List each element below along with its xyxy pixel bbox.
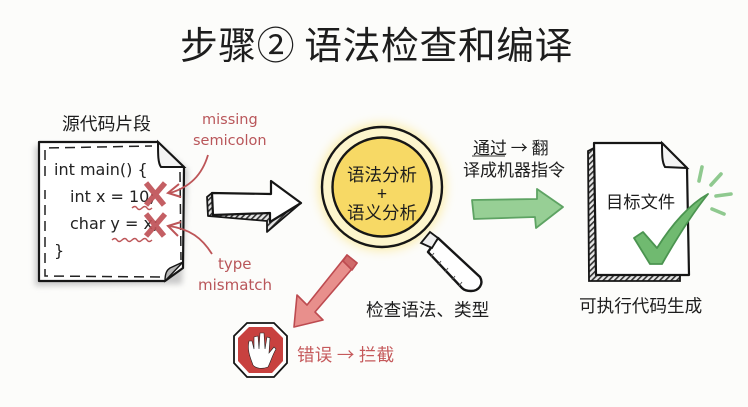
lens text: 语义分析 bbox=[347, 200, 417, 225]
callout: type mismatch bbox=[168, 222, 272, 294]
icon: green check bbox=[634, 167, 731, 264]
code lines: int main() { bbox=[54, 160, 148, 179]
caption: pass and translate bbox=[463, 134, 565, 181]
lens text bbox=[347, 162, 417, 225]
arrow: success path bbox=[472, 189, 563, 228]
object file document bbox=[588, 143, 689, 281]
callout: missing semicolon bbox=[168, 112, 267, 197]
title: 步骤② 语法检查和编译 bbox=[180, 15, 573, 70]
icon: stop sign bbox=[234, 323, 287, 377]
document label: 目标文件 bbox=[606, 188, 675, 213]
caption: check syntax and types: 检查语法、类型 bbox=[366, 297, 489, 322]
lens text: + bbox=[377, 181, 387, 206]
code lines: char y = x; bbox=[70, 214, 158, 233]
callout: type mismatch: type bbox=[218, 255, 252, 273]
caption: executable generated: 可执行代码生成 bbox=[579, 293, 702, 318]
code page bbox=[35, 142, 188, 286]
label: error blocked: 错误 → 拦截 bbox=[297, 342, 394, 367]
code lines: int x = 10; bbox=[70, 187, 155, 206]
icon: hand bbox=[248, 333, 276, 368]
lens ring bbox=[322, 127, 442, 247]
arrow: error path bbox=[294, 255, 357, 327]
handle bbox=[421, 232, 481, 291]
red cross marks bbox=[146, 183, 165, 236]
panel: source code snippet bbox=[35, 110, 272, 294]
caption: pass and translate: 通过 → 翻 bbox=[473, 134, 549, 159]
callout: missing semicolon: semicolon bbox=[193, 133, 267, 149]
lens glow bbox=[318, 123, 446, 251]
squiggle underlines bbox=[112, 206, 152, 242]
callout: missing semicolon: missing bbox=[202, 112, 258, 128]
heading: source code snippet: 源代码片段 bbox=[62, 110, 151, 136]
callout: type mismatch: mismatch bbox=[198, 276, 272, 294]
code lines: } bbox=[54, 241, 64, 260]
lens text: 语法分析 bbox=[347, 162, 417, 187]
magnifier bbox=[318, 123, 481, 291]
caption: pass and translate: 译成机器指令 bbox=[463, 156, 565, 181]
code lines bbox=[54, 160, 158, 260]
arrow: source to analyzer bbox=[207, 181, 301, 232]
